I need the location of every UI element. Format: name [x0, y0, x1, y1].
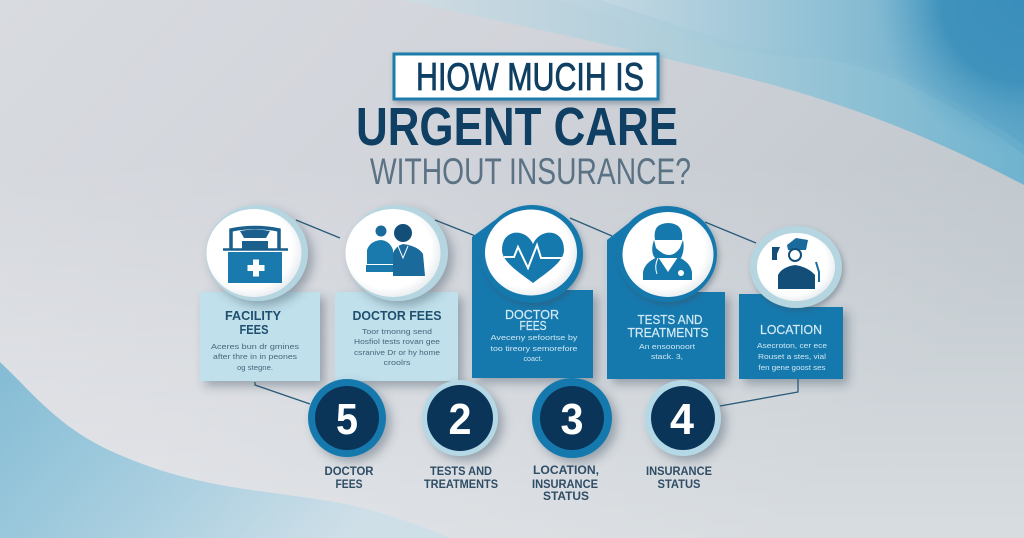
icon: doctor and assistant: [346, 205, 448, 301]
connector lines: [255, 218, 798, 406]
title badge: HIOW MUCIH IS: [416, 56, 644, 99]
description text: [490, 333, 578, 363]
panel: facility fees: FEES: [240, 323, 268, 337]
step 2: tests and treatments: 2: [448, 395, 472, 444]
step 3: location and insurance status: STATUS: [543, 491, 589, 503]
icon: heart with pulse: [481, 205, 583, 303]
step 4: insurance status: 4: [670, 395, 695, 444]
panel: doctor fees heart: [472, 205, 593, 378]
step 5: doctor fees: FEES: [336, 479, 363, 491]
description text: fen gene goost ses: [758, 363, 826, 372]
step 4: insurance status: STATUS: [658, 479, 701, 491]
step 5: doctor fees: DOCTOR: [324, 466, 374, 478]
heading: tests and treatments: TESTS AND: [638, 313, 702, 327]
step 5: doctor fees: 5: [336, 395, 358, 444]
description text: [639, 342, 696, 361]
step 3: location and insurance status: INSURANCE: [532, 479, 598, 491]
description text: too tireory semorefore: [490, 344, 578, 353]
heading: doctor fees: DOCTOR: [505, 308, 559, 322]
description text: Toor tmonng send: [362, 327, 432, 336]
heading: doctor fees: DOCTOR FEES: [352, 309, 442, 323]
panel: location: [739, 226, 843, 379]
icon: person with location sign: [750, 226, 842, 308]
subheading: without insurance: WITHOUT INSURANCE?: [370, 150, 691, 192]
step 5: doctor fees: [308, 379, 386, 491]
description text: Hosfiol tests rovan gee: [354, 337, 440, 346]
step 4: insurance status: INSURANCE: [646, 466, 712, 478]
icon: medical kit: [206, 205, 308, 301]
panel: facility fees: [200, 205, 320, 381]
description text: coact.: [524, 354, 542, 363]
panel: tests and treatments: TREATMENTS: [628, 326, 708, 340]
description text: Aveceny sefoortse by: [490, 333, 578, 342]
panel: doctor fees heart: FEES: [520, 319, 546, 333]
description text: csranive Dr or hy home: [354, 348, 440, 357]
description text: og stegne.: [237, 363, 273, 372]
description text: Asecroton, cer ece: [757, 341, 827, 350]
step 3: location and insurance status: 3: [560, 395, 584, 444]
heading: location: LOCATION: [760, 323, 822, 337]
step 2: tests and treatments: TREATMENTS: [424, 479, 498, 491]
description text: stack. 3,: [651, 352, 683, 361]
description text: [757, 341, 827, 372]
panel: tests and treatments: [607, 206, 725, 379]
description text: after thre in in peones: [213, 352, 297, 361]
step 4: insurance status: [645, 380, 721, 491]
description text: croolrs: [384, 358, 411, 367]
description text: Aceres bun dr gmines: [211, 342, 299, 351]
description text: [211, 342, 299, 372]
step 3: location and insurance status: [532, 378, 612, 503]
step 2: tests and treatments: [422, 380, 498, 491]
heading: facility fees: FACILITY: [225, 309, 282, 323]
step 2: tests and treatments: TESTS AND: [430, 466, 492, 478]
step 3: location and insurance status: LOCATION,: [533, 465, 599, 477]
panel: doctor fees: [335, 205, 458, 381]
heading: urgent care: URGENT CARE: [356, 97, 678, 157]
description text: An ensoonoort: [639, 342, 696, 351]
description text: Rouset a stes, vial: [758, 352, 826, 361]
icon: nurse with stethoscope: [617, 206, 717, 302]
description text: [354, 327, 440, 367]
